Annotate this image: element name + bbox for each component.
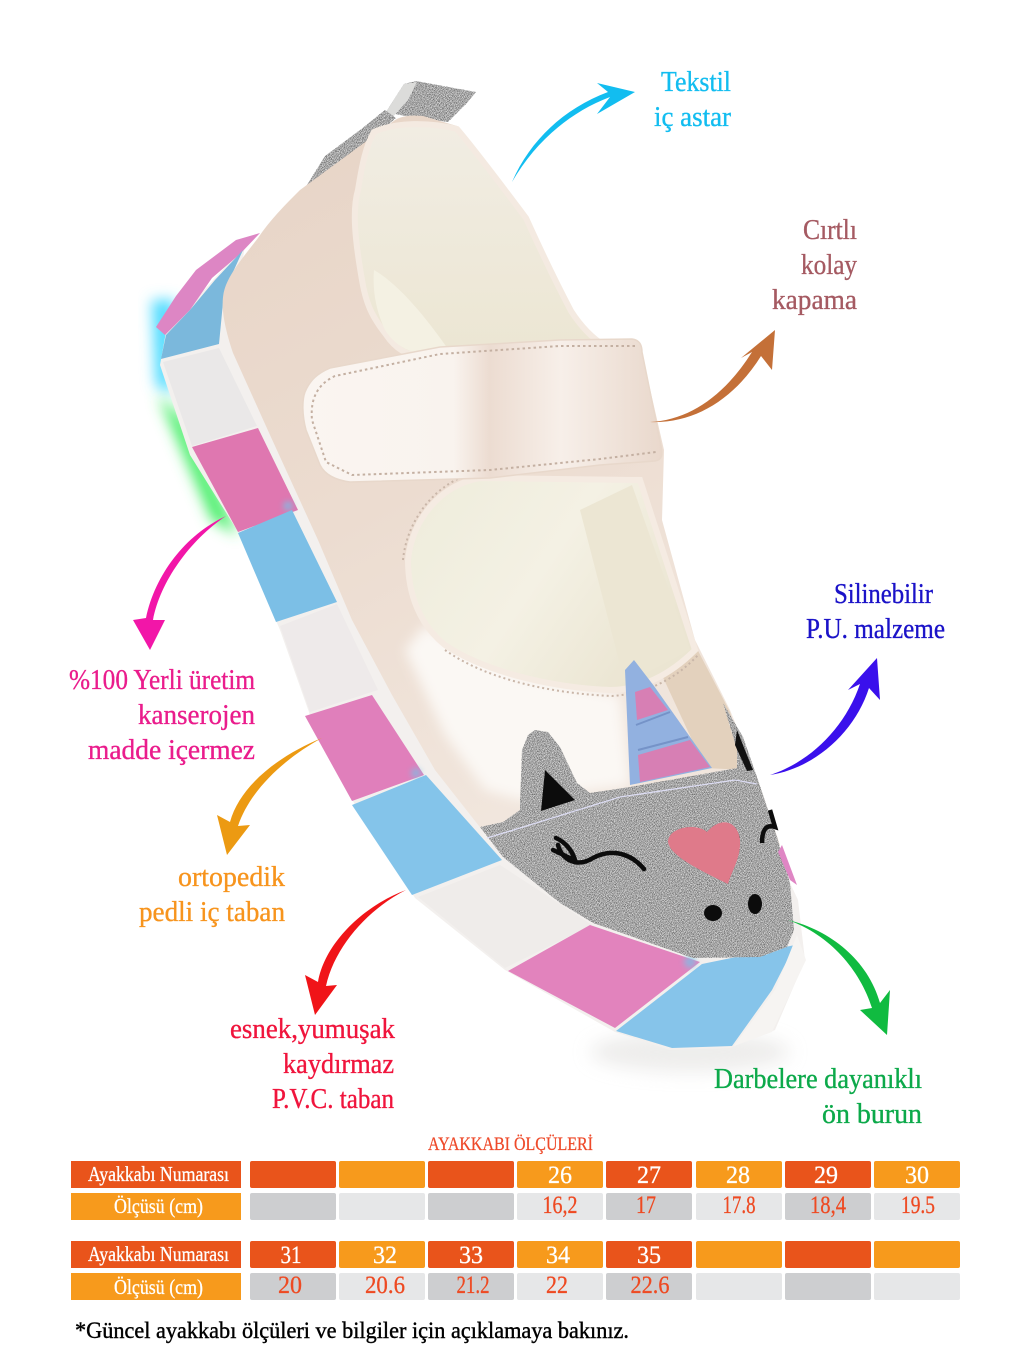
label: taban: kaydırmaz: [283, 1048, 394, 1080]
label: Silinebilir P.U. malzeme: P.U. malzeme: [806, 613, 945, 645]
measure cells: [250, 1192, 960, 1220]
label: ön burun: [714, 1063, 922, 1130]
label: yerli üretim: kanserojen: [138, 699, 255, 731]
front opening: [403, 472, 698, 696]
colour bleeds: [283, 501, 696, 968]
sole base: [160, 245, 805, 1050]
measure cells: 17.8: [722, 1192, 756, 1219]
arrow: cyan: [512, 83, 635, 182]
stripe: pink: [192, 428, 298, 532]
sole shadow: [590, 1032, 790, 1072]
size table 1: [71, 1161, 960, 1220]
measure cells: 17: [636, 1192, 656, 1219]
velcro strap: [303, 339, 662, 482]
stripe: blue toe: [616, 945, 795, 1048]
label: ortopedik: pedli iç taban: [139, 896, 285, 928]
measure cells: 22.6: [630, 1272, 670, 1299]
label: Cırtlı kolay kapama: Cırtlı: [803, 214, 857, 246]
stripe: white: [418, 865, 592, 968]
arrow: pink: [133, 516, 226, 650]
stripe: pink: [305, 695, 424, 801]
strap stitching: [312, 346, 656, 475]
label: taban: esnek,yumuşak: [230, 1013, 395, 1045]
footnote: *Güncel ayakkabı ölçüleri ve bilgiler için açıklamaya bakınız.: [75, 1318, 629, 1343]
right eye: [762, 810, 775, 843]
label: ön burun: ön burun: [822, 1098, 922, 1130]
back opening lining: [355, 124, 605, 356]
size cells: 33: [459, 1242, 483, 1269]
stripe: top blue: [161, 250, 243, 359]
header: Ölçüsü: Ölçüsü (cm): [114, 1275, 203, 1299]
label: taban: [230, 1013, 395, 1115]
LED glow: blue: [152, 300, 175, 395]
arrow: orange: [217, 738, 322, 855]
heart: [668, 822, 740, 884]
shoe illustration: [156, 81, 806, 1050]
toe pink accent: [778, 845, 797, 885]
label: yerli üretim: %100 Yerli üretim: [69, 664, 255, 696]
upper highlight: [405, 625, 630, 800]
label: Tekstil iç astar: Tekstil: [661, 66, 731, 98]
arrow: green: [788, 920, 890, 1035]
table title: AYAKKABI ÖLÇÜLERİ: [428, 1134, 593, 1155]
size cells: 29: [814, 1162, 838, 1189]
stripe: blue: [352, 775, 502, 895]
label: yerli üretim: [69, 664, 255, 766]
sole stripes: [156, 233, 806, 1048]
stripe: white: [163, 348, 257, 446]
winking eye: [553, 838, 644, 869]
ear inner right: [735, 730, 753, 771]
label: ortopedik: ortopedik: [178, 861, 285, 893]
size cells: 31: [280, 1242, 302, 1269]
size cells: 34: [546, 1242, 570, 1269]
ear inner left: [541, 770, 575, 811]
arrow: red: [305, 890, 406, 1015]
nostrils: [704, 894, 762, 921]
size cells: 30: [905, 1162, 929, 1189]
measure cells: 20.6: [365, 1272, 405, 1299]
inner lining: [408, 478, 695, 690]
label: Silinebilir P.U. malzeme: [806, 578, 945, 645]
label: Silinebilir P.U. malzeme: Silinebilir: [834, 578, 933, 610]
label: taban: P.V.C. taban: [272, 1083, 394, 1115]
header: Ölçüsü: [71, 1273, 241, 1300]
header: Ölçüsü: Ölçüsü (cm): [114, 1194, 203, 1218]
rim stitch: [403, 472, 698, 696]
header: Ayakkabı Numarası: Ayakkabı Numarası: [88, 1162, 229, 1186]
measure cells: [250, 1272, 960, 1300]
arrow: brown: [650, 330, 775, 422]
header: Ölçüsü: [71, 1193, 241, 1220]
label: ön burun: Darbelere dayanıklı: [714, 1063, 922, 1095]
unicorn horn: [625, 660, 712, 785]
arrow: blue: [770, 658, 880, 775]
size cells: [250, 1241, 960, 1269]
stripe: top pink: [156, 233, 260, 335]
side lining: [580, 485, 690, 684]
measure cells: 20: [278, 1272, 302, 1299]
stripe: pink: [508, 925, 700, 1028]
label: Cırtlı kolay kapama: kolay: [801, 249, 857, 281]
label: Cırtlı kolay kapama: kapama: [772, 284, 857, 316]
size table 2: [71, 1241, 960, 1300]
stripe: blue: [238, 510, 337, 622]
measure cells: 21.2: [456, 1272, 490, 1299]
size cells: [250, 1161, 960, 1189]
stripe: white: [280, 604, 378, 712]
size cells: 27: [637, 1162, 661, 1189]
label: Tekstil iç astar: [654, 66, 731, 133]
size cells: 35: [637, 1242, 661, 1269]
LED glow: green: [158, 395, 238, 535]
tan panel beside horn: [655, 645, 745, 770]
toe stitching: [487, 780, 757, 838]
glitter toe cap: [480, 703, 794, 958]
label: yerli üretim: madde içermez: [88, 734, 255, 766]
label: Cırtlı kolay kapama: [772, 214, 857, 316]
size cells: 28: [726, 1162, 750, 1189]
label: ortopedik: [139, 861, 285, 928]
measure cells: 16,2: [542, 1192, 578, 1219]
toe white wrap: [734, 935, 806, 1046]
measure cells: 22: [546, 1272, 568, 1299]
patent upper: [223, 116, 780, 845]
header: Ayakkabı Numarası: Ayakkabı Numarası: [88, 1242, 229, 1266]
measure cells: 19.5: [901, 1192, 935, 1219]
size cells: 32: [373, 1242, 397, 1269]
label: Tekstil iç astar: iç astar: [654, 101, 731, 133]
measure cells: 18,4: [810, 1192, 846, 1219]
size cells: 26: [548, 1162, 572, 1189]
back insole: [374, 270, 450, 354]
heel pull tab: [297, 81, 476, 201]
